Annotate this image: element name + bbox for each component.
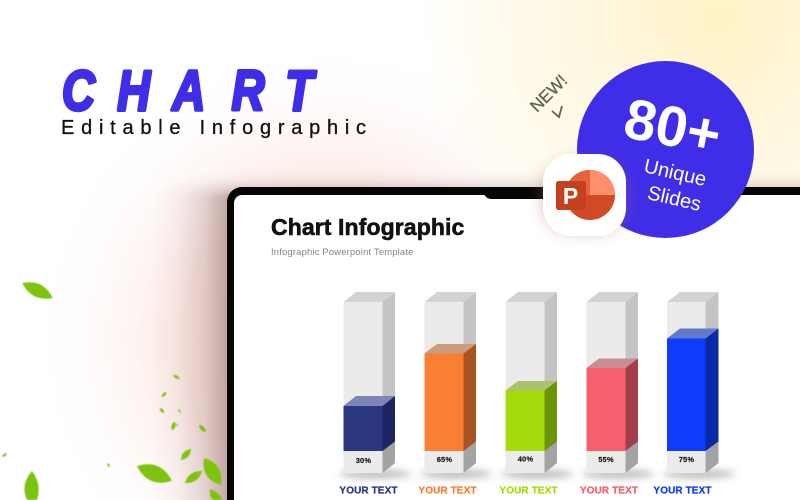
laptop frame bbox=[227, 187, 800, 500]
bar 3: 40% bbox=[501, 292, 573, 478]
bar 1: 30%: 30% bbox=[356, 456, 371, 465]
icon: PowerPoint: P bbox=[563, 183, 578, 209]
bar 2: 65% bbox=[420, 292, 492, 478]
arrow bbox=[552, 106, 562, 117]
slide subtitle: Infographic Powerpoint Template bbox=[271, 246, 414, 257]
leaves bbox=[1, 277, 227, 500]
label 2: YOUR TEXT bbox=[418, 486, 477, 496]
label 3: YOUR TEXT bbox=[499, 486, 558, 496]
slide title: Chart Infographic bbox=[271, 214, 464, 240]
subtitle: Editable Infographic bbox=[61, 117, 373, 139]
bar 1: 30% bbox=[339, 292, 411, 478]
label 1: YOUR TEXT bbox=[339, 486, 398, 496]
bar 2: 65%: 65% bbox=[437, 455, 452, 464]
badge circle bbox=[577, 61, 754, 238]
badge number: 80+ bbox=[619, 86, 726, 168]
bar 3: 40%: 40% bbox=[518, 454, 533, 464]
label 4: YOUR TEXT bbox=[580, 486, 638, 496]
title: CHART bbox=[62, 58, 317, 122]
badge text 2: Slides bbox=[645, 182, 703, 216]
bar 5: 75% bbox=[663, 292, 735, 478]
bar 4: 55%: 55% bbox=[598, 455, 614, 464]
badge text: Unique bbox=[642, 155, 708, 191]
new label: NEW! bbox=[526, 71, 571, 116]
bar chart bbox=[339, 292, 735, 496]
icon: PowerPoint bbox=[543, 154, 626, 236]
bar 4: 55% bbox=[582, 292, 654, 478]
bar 5: 75%: 75% bbox=[679, 455, 694, 464]
label 5: YOUR TEXT bbox=[653, 486, 712, 496]
